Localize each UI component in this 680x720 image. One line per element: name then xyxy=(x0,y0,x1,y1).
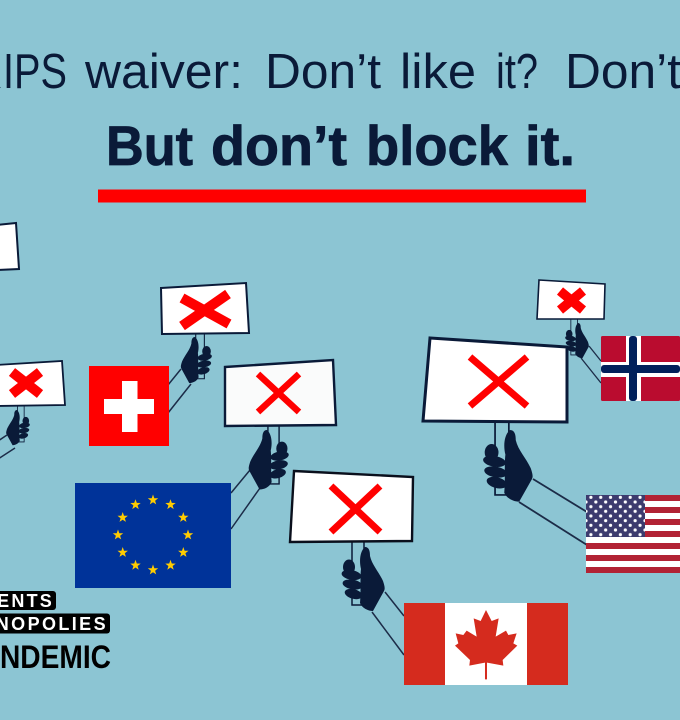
hand xyxy=(181,331,212,383)
placard xyxy=(225,360,336,426)
title: second line: But xyxy=(106,114,193,177)
title: first line xyxy=(0,45,680,99)
red underline xyxy=(98,190,586,202)
hand xyxy=(6,406,30,445)
protester: Norway xyxy=(537,280,605,383)
red cross xyxy=(258,374,299,412)
red cross xyxy=(560,291,583,310)
title: second line: block xyxy=(366,114,509,177)
protester: left edge xyxy=(0,361,65,459)
placard xyxy=(290,471,413,542)
red cross xyxy=(470,357,527,406)
campaign logo xyxy=(0,591,111,675)
arm xyxy=(581,346,601,383)
title: second line: it. xyxy=(525,114,575,177)
title: second line xyxy=(106,114,575,177)
flag: European Union xyxy=(75,483,231,588)
title: second line: don’t xyxy=(211,114,347,177)
flag: Canada xyxy=(404,603,568,685)
hand xyxy=(249,423,289,490)
title: first line: IPS xyxy=(3,45,67,99)
flag: Switzerland xyxy=(89,366,169,446)
arm xyxy=(519,479,587,545)
red cross xyxy=(12,372,40,394)
arm xyxy=(372,592,404,655)
placard xyxy=(161,283,249,334)
arm xyxy=(0,435,15,459)
sign: top left, cut off xyxy=(0,223,19,270)
title: first line: Don’t xyxy=(265,45,381,99)
red cross xyxy=(182,294,229,326)
placard xyxy=(423,338,567,422)
arm xyxy=(231,470,260,529)
red cross xyxy=(331,486,380,532)
title: first line: waiver: xyxy=(84,45,243,99)
hand xyxy=(565,319,589,358)
protester: United States xyxy=(423,338,587,545)
title: first line: like xyxy=(400,45,476,99)
flag: United States xyxy=(586,495,680,573)
arm xyxy=(168,369,191,413)
title: first line: it? xyxy=(496,45,538,99)
maple leaf xyxy=(455,610,517,679)
placard xyxy=(537,280,605,319)
title: first line: Don’t xyxy=(565,45,680,99)
placard xyxy=(0,361,65,406)
protester: Switzerland xyxy=(161,283,249,413)
protester: European Union xyxy=(225,360,336,529)
hand xyxy=(341,539,385,611)
protester: Canada xyxy=(290,471,413,655)
flag: Norway xyxy=(601,336,680,401)
hand xyxy=(482,421,533,502)
